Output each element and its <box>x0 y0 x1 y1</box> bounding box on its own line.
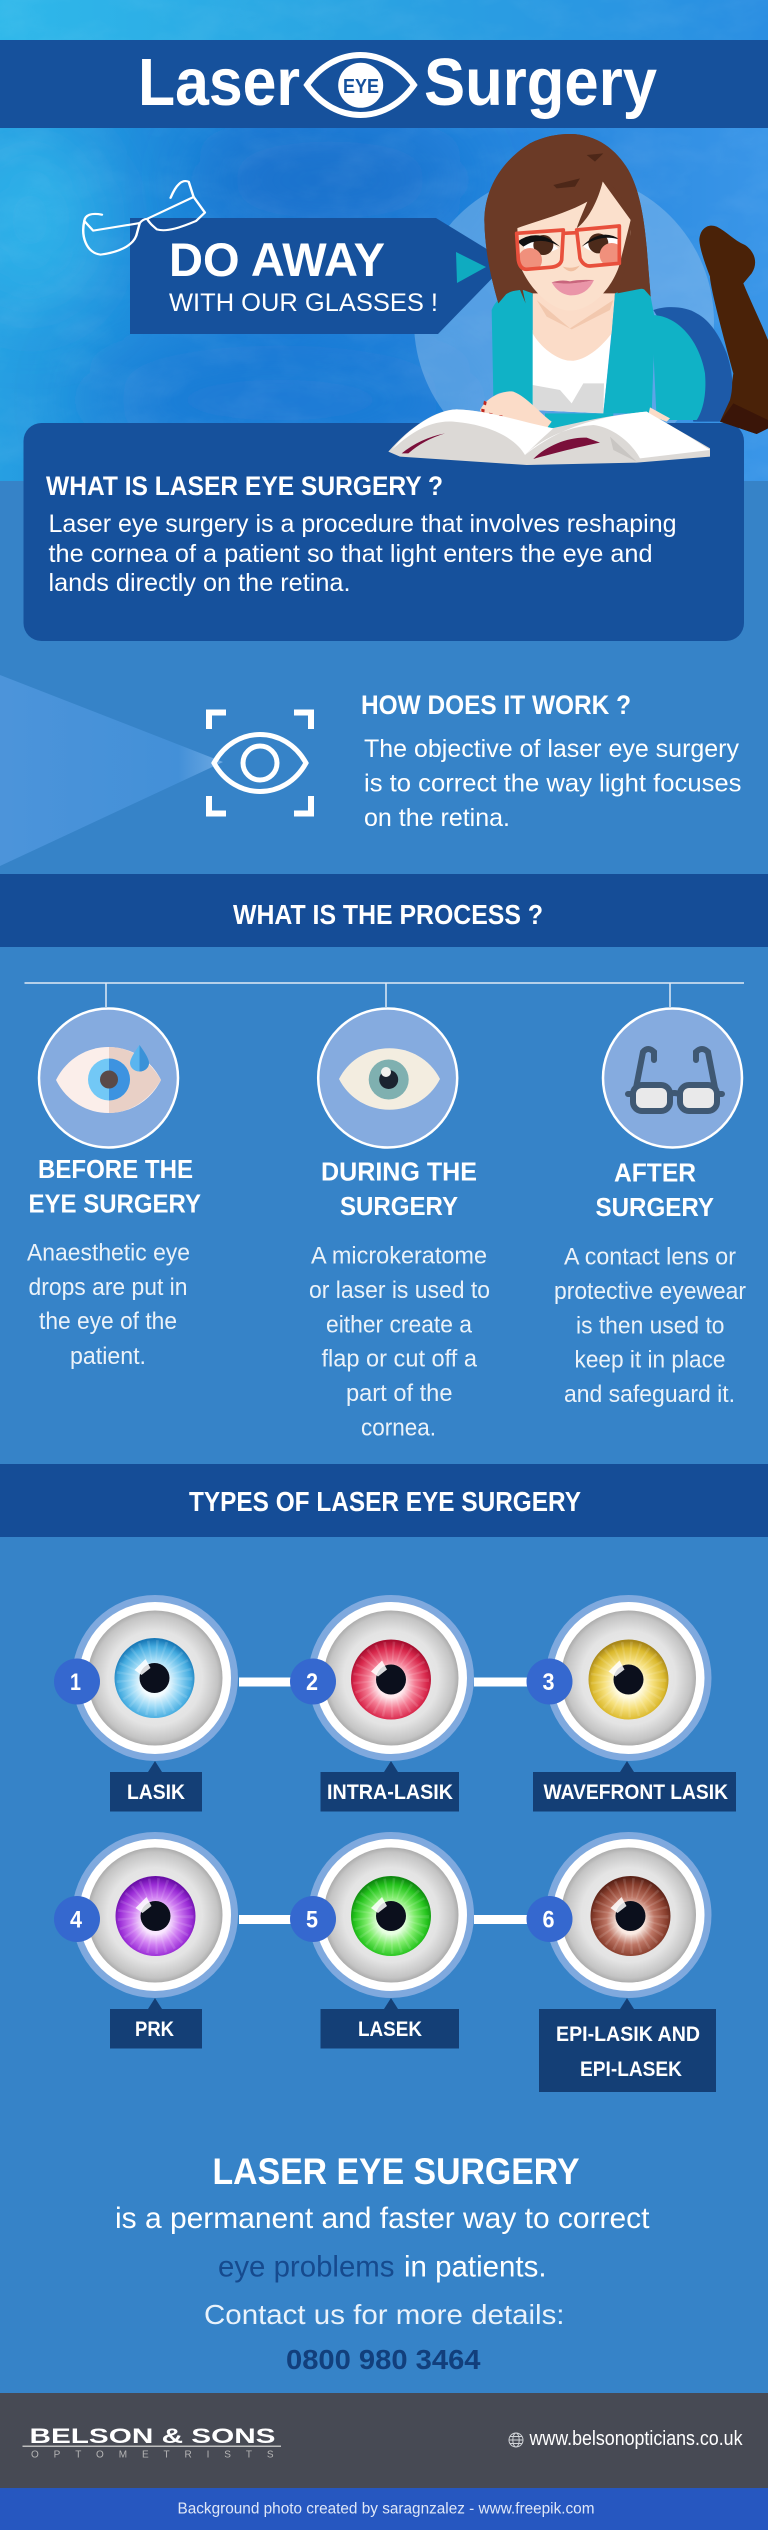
front hair <box>484 134 651 303</box>
body text: is then used to <box>576 1312 724 1340</box>
body text: or laser is used to <box>309 1277 490 1304</box>
label: PRK <box>135 2017 174 2041</box>
closing line 2: eye problems <box>218 2250 394 2284</box>
eyeball <box>308 1595 474 1761</box>
connectors between eyes <box>239 1678 529 1924</box>
heading <box>596 1160 714 1222</box>
legs <box>699 226 768 434</box>
heading <box>321 1158 477 1221</box>
heading: DURING THE <box>321 1158 477 1186</box>
body text: and safeguard it. <box>564 1381 735 1408</box>
type 4: PRK <box>54 1832 238 2048</box>
number badge <box>526 1658 572 1704</box>
body text: keep it in place <box>574 1346 726 1374</box>
credits bar <box>0 2488 768 2530</box>
panel body text <box>48 510 676 597</box>
panel body text: the cornea of a patient so that light enters the eye and <box>48 540 653 568</box>
body text: A contact lens or <box>564 1244 736 1270</box>
section heading: types of laser eye surgery: TYPES OF LASER EYE SURGERY <box>189 1486 581 1517</box>
face <box>517 180 631 311</box>
closing line 1: is a permanent and faster way to correct <box>115 2202 650 2235</box>
cardigan body <box>652 315 705 420</box>
panel heading: WHAT IS LASER EYE SURGERY ? <box>46 471 443 501</box>
shirt <box>532 330 612 413</box>
body text: Anaesthetic eye <box>27 1240 190 1266</box>
icon: eye in viewfinder <box>209 712 311 814</box>
logo: Belson and Sons: OPTOMETRISTS <box>31 2450 274 2460</box>
number badge: 1 <box>70 1669 81 1696</box>
footer bar <box>0 2393 768 2488</box>
chest <box>533 293 615 361</box>
credits bar: Background photo created by saragnzalez - www.freepik.com <box>178 2500 594 2518</box>
jeans <box>653 307 732 422</box>
callout subheading: WITH OUR GLASSES ! <box>169 289 438 317</box>
body text: either create a <box>326 1312 473 1338</box>
closing statement <box>115 2151 650 2375</box>
panel body text: lands directly on the retina. <box>48 569 350 597</box>
body text: part of the <box>346 1380 452 1407</box>
callout heading: DO AWAY <box>169 233 385 286</box>
label: LASEK <box>358 2017 422 2041</box>
heading: EYE SURGERY <box>28 1190 201 1218</box>
eyeball <box>308 1832 474 1998</box>
section heading: what is the process <box>0 874 768 947</box>
title bar <box>0 40 768 128</box>
type 1: LASIK <box>54 1595 238 1812</box>
number badge <box>54 1658 100 1704</box>
nose and lips <box>552 265 594 295</box>
block: how does it work <box>361 690 742 832</box>
phone number: 0800 980 3464 <box>286 2344 481 2375</box>
logo: Belson and Sons <box>22 2424 281 2460</box>
type 3: WAVEFRONT LASIK <box>526 1595 736 1812</box>
label <box>533 1761 736 1812</box>
logo: Belson and Sons: BELSON & SONS <box>30 2424 276 2448</box>
callout: do away with our glasses <box>130 218 508 334</box>
body text: A microkeratome <box>311 1242 487 1270</box>
heading: AFTER <box>614 1160 696 1188</box>
process step 2: during the surgery <box>309 1008 490 1442</box>
number badge <box>526 1896 572 1942</box>
icon: globe <box>509 2433 523 2447</box>
type 2: INTRA-LASIK <box>290 1595 474 1812</box>
icon: outline glasses <box>83 181 205 255</box>
heading <box>28 1156 201 1218</box>
label <box>110 1761 202 1812</box>
label: WAVEFRONT LASIK <box>544 1780 728 1804</box>
icon: eye with drop <box>39 1008 178 1148</box>
eyeball <box>72 1832 238 1998</box>
panel body text: Laser eye surgery is a procedure that involves reshaping <box>48 510 676 538</box>
cardigan left <box>492 290 533 407</box>
label <box>320 1761 459 1812</box>
body text: The objective of laser eye surgery <box>364 735 739 763</box>
body text <box>309 1242 490 1442</box>
number badge: 2 <box>306 1669 318 1696</box>
contact line: Contact us for more details: <box>204 2299 564 2330</box>
type 5: LASEK <box>290 1832 474 2048</box>
type 6: EPI-LASIK and EPI-LASEK <box>526 1832 716 2092</box>
heading: BEFORE THE <box>38 1156 193 1184</box>
body text: drops are put in <box>28 1274 188 1301</box>
process step 3: after surgery <box>554 1008 746 1408</box>
body text: cornea. <box>361 1414 436 1442</box>
section heading: what is the process: WHAT IS THE PROCESS ? <box>233 899 543 930</box>
body text: the eye of the <box>39 1308 177 1335</box>
eyeball <box>546 1595 712 1761</box>
body text <box>27 1240 190 1370</box>
website: www.belsonopticians.co.uk <box>529 2428 743 2450</box>
heading: SURGERY <box>596 1194 714 1222</box>
icon: eye logo: EYE <box>343 76 379 98</box>
eyeball <box>546 1832 712 1998</box>
body text <box>554 1244 746 1408</box>
title word: Surgery: Surgery <box>424 45 657 120</box>
label: EPI-LASIK AND <box>556 2022 700 2046</box>
ears <box>492 231 506 259</box>
number badge: 3 <box>542 1669 554 1696</box>
number badge: 6 <box>542 1906 554 1934</box>
body text: flap or cut off a <box>322 1346 478 1372</box>
number badge <box>290 1658 336 1704</box>
label: EPI-LASEK <box>580 2057 682 2081</box>
label <box>110 1998 202 2048</box>
eyeball <box>72 1595 238 1761</box>
label: LASIK <box>127 1780 185 1804</box>
number badge <box>54 1896 100 1942</box>
number badge <box>290 1896 336 1942</box>
body text: is to correct the way light focuses <box>364 770 742 798</box>
closing line 2 <box>218 2250 546 2284</box>
heading: HOW DOES IT WORK ? <box>361 690 631 720</box>
number badge: 4 <box>70 1906 83 1934</box>
closing line 2: in patients. <box>404 2250 546 2284</box>
label <box>539 1998 716 2092</box>
eyes <box>517 233 621 255</box>
label <box>320 1998 459 2048</box>
textured blue header background <box>0 0 768 481</box>
number badge: 5 <box>306 1906 318 1934</box>
open book <box>388 409 710 465</box>
red glasses <box>517 226 619 269</box>
body text: patient. <box>70 1343 146 1370</box>
panel: what is laser eye surgery <box>24 423 744 641</box>
blush <box>520 243 618 268</box>
closing heading: LASER EYE SURGERY <box>212 2151 580 2192</box>
body text <box>364 735 742 832</box>
icon: eye logo <box>307 55 414 115</box>
hand and sleeve <box>480 391 670 428</box>
illustration: girl reading a book <box>388 134 768 465</box>
icon: glasses <box>603 1008 742 1148</box>
body text: protective eyewear <box>554 1278 746 1305</box>
section heading: types of laser eye surgery <box>0 1464 768 1537</box>
back hair <box>484 134 651 303</box>
process step 1: before the eye surgery <box>27 1008 201 1370</box>
icon: eye <box>318 1008 457 1148</box>
title word: Laser: Laser <box>138 45 300 120</box>
light beam <box>0 675 223 866</box>
label: INTRA-LASIK <box>327 1780 453 1804</box>
cardigan right <box>603 288 655 413</box>
heading: SURGERY <box>340 1193 458 1221</box>
body text: on the retina. <box>364 804 510 832</box>
callout arrow <box>456 252 486 283</box>
process timeline lines <box>24 983 744 1007</box>
decorative circle behind character <box>414 172 714 472</box>
